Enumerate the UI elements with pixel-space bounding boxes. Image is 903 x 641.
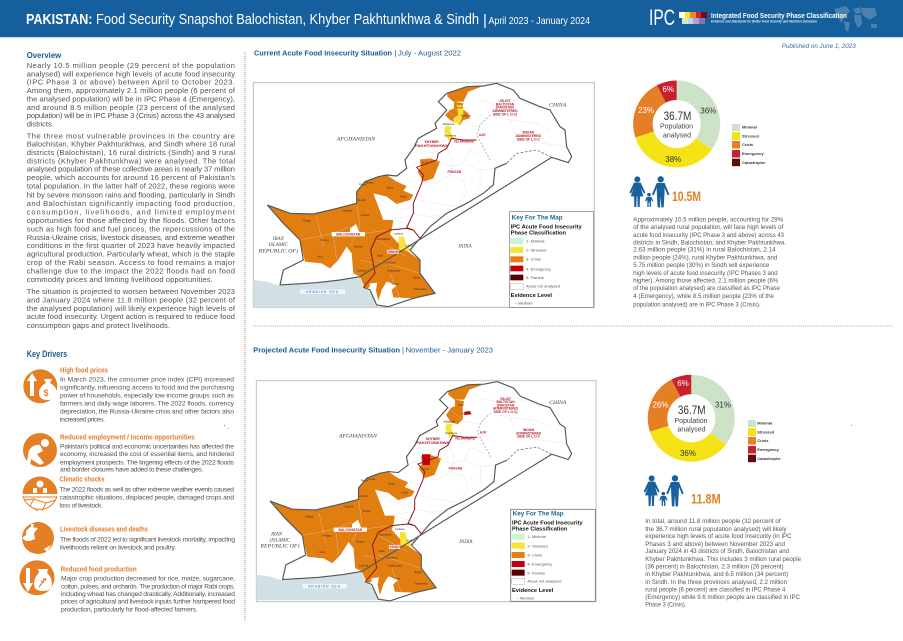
text: projected summary: experience high levels of acute food insecurity (in IPC: [645, 534, 792, 540]
driver: reduced employment: [60, 432, 235, 474]
legend: current donut: [732, 124, 766, 166]
map legend: Areas not analysed: [527, 579, 561, 584]
driver: livestock: Livestock diseases and deaths: [60, 524, 148, 534]
text: current summary: of the analysed rural population, will face high levels of: [633, 225, 784, 231]
driver: climatic shocks: Climatic shocks: [60, 474, 104, 484]
map labels: Panjgur: [323, 533, 332, 537]
map labels: PAKHTUNKHWA: [416, 441, 450, 445]
map labels: ISLAMIC: [268, 243, 289, 248]
overview text: and Balochistan significantly impacting food production,: [27, 199, 235, 208]
map: current situation: [253, 83, 594, 307]
map labels: CHINA: [549, 401, 567, 406]
overview text: commodity prices and limiting livelihood opportunities.: [27, 275, 213, 284]
overview text: the analysed population) will be in IPC Phase 4 (Emergency),: [27, 94, 235, 104]
map labels: Tharparkar: [413, 287, 427, 291]
overview text: and around 8.5 million people (23 percent of the analysed: [27, 103, 235, 112]
overview heading: Overview: [27, 50, 62, 60]
legend: projected donut: [748, 420, 781, 462]
map labels: Awaran: [356, 540, 365, 544]
driver: reduced food production: production, particularly for flood-affected farmers.: [61, 606, 198, 613]
donut chart: current: analysed: [663, 132, 691, 140]
map labels: Chagai: [305, 514, 314, 518]
map labels: Nushki: [358, 198, 366, 202]
heading: current situation: |: [394, 48, 396, 58]
map labels: Washuk: [345, 505, 355, 509]
heading: projected situation: Projected Acute Food Insecurity Situation: [253, 346, 400, 355]
map labels: ADMINISTERED: [516, 431, 542, 435]
map labels: Jamshoro: [386, 555, 398, 559]
map labels: ADMINISTERED: [493, 407, 519, 411]
map labels: BALTISTAN: [496, 400, 515, 404]
text: current summary: million people (24%), rural Khyber Pakhtunkhwa, and: [633, 256, 777, 262]
donut chart: current: 6%: [663, 85, 674, 94]
header band: [0, 0, 903, 38]
map labels: PAKHTUNKHWA: [415, 144, 449, 148]
map legend: – Medium: [517, 595, 535, 600]
map labels: Pishin: [361, 479, 369, 483]
map labels: Quetta: [365, 180, 374, 184]
map labels: AFGHANISTAN: [338, 435, 378, 440]
map labels: Kohistan: [461, 114, 472, 118]
icon: high food prices: $: [43, 388, 49, 398]
overview text: (IPC Phase 3 or above) between April to October 2023.: [27, 78, 235, 87]
map legend: 5- Famine: [527, 570, 546, 575]
map labels: Sukkur: [407, 539, 415, 543]
icon: livestock: [22, 522, 54, 554]
text: projected summary: Phase 3 (Crisis).: [645, 603, 687, 609]
text: projected summary: (36 percent) in Balochistan, 2.3 million (26 percent): [645, 565, 784, 571]
driver: climatic shocks: The 2022 floods as well as other extreme weather events caused: [60, 486, 234, 493]
legend: current donut: Minimal: [742, 124, 757, 130]
key drivers heading: Key Drivers: [27, 349, 67, 359]
overview text: and January 2024 where 11.8 million people (32 percent of: [27, 296, 236, 305]
overview text: crop of the Rabi season. Access to food remains a major: [27, 258, 235, 267]
map legend: Evidence Level: [512, 588, 554, 594]
driver: high food prices: In March 2023, the consumer price index (CPI) increased: [60, 376, 234, 384]
legend: projected donut: Catastrophe: [757, 456, 781, 461]
legend: projected donut: Emergency: [757, 447, 780, 452]
heading: projected situation: [253, 346, 493, 355]
title: Food Security Snapshot Balochistan, Khyber Pakhtunkhwa & Sindh: [96, 11, 479, 28]
legend: projected donut: Crisis: [757, 438, 769, 443]
panel: overview: [27, 50, 236, 330]
driver: climatic shocks: catastrophic situations, displaced people, damaged crops and: [60, 494, 234, 501]
map labels: Nowshera: [445, 431, 458, 435]
map labels: Kharan: [363, 509, 372, 513]
overview text: population) will be in IPC Phase 3 (Crisis) across the 43 analysed: [27, 111, 235, 120]
map labels: Jacobabad: [379, 532, 392, 536]
map labels: Larkana: [394, 231, 404, 235]
text: current summary: Approximately 10.5 million people, accounting for 29%: [633, 218, 784, 224]
overview text: analysed population of these collective areas is nearly 37 million: [27, 165, 235, 174]
stat: 10.5M: 10.5M: [672, 189, 701, 204]
overview text: such as high food and fuel prices, the repercussions of the: [27, 225, 235, 234]
map labels: Kohlu: [401, 491, 409, 495]
map labels: Kohistan: [462, 411, 473, 415]
map labels: CHINA: [549, 103, 567, 108]
map labels: Nowshera: [444, 134, 456, 138]
map labels: PUNJAB: [447, 170, 462, 174]
map legend: IPC Acute Food Insecurity: [511, 225, 583, 231]
text: projected summary: (Emergency) while 9.6 million people are classified in IPC: [645, 595, 801, 601]
text: current summary: 4 (Emergency), while 8.5 million people (23% of the: [633, 294, 775, 300]
driver: reduced food production: prices of agricultural and livestock inputs further hampered food: [61, 598, 235, 606]
map labels: INDIAN: [523, 131, 535, 135]
map labels: ADMINISTERED: [516, 134, 542, 138]
donut chart: current: Population: [660, 124, 693, 130]
map legend: Phase Classification: [511, 231, 567, 237]
donut chart: projected: [644, 371, 739, 466]
map labels: (PAKISTAN: [496, 106, 514, 110]
driver: reduced employment: employment prospects. The lingering effects of the 2022 floods: [60, 460, 235, 466]
driver: reduced food production: Reduced food production: [61, 564, 137, 574]
text: current summary: of the population analysed) are classified as IPC Phase: [633, 286, 781, 292]
driver: high food prices: power of households, especially low-income groups such as: [60, 392, 235, 400]
driver: high food prices: High food prices: [60, 366, 108, 374]
map labels: Awaran: [354, 244, 363, 248]
overview text: opportunities for those affected by the floods. Other factors: [27, 216, 235, 225]
map labels: Larkana: [395, 527, 405, 531]
map labels: ARABIAN SEA: [308, 584, 341, 588]
overview text: districts (Balochistan), 16 rural districts (Sindh) and 9 rural: [27, 148, 235, 157]
text: projected summary: Khyber Pakhtunkhwa. This includes 3 million rural people: [645, 557, 802, 563]
map labels: ISLAMABAD: [455, 437, 476, 441]
heading: projected situation: |: [402, 346, 404, 355]
map labels: INDIA: [458, 540, 473, 545]
map labels: Kharan: [361, 213, 370, 217]
driver: high food prices: increased prices.: [60, 416, 105, 424]
donut chart: current: [630, 77, 724, 171]
map legend: – Medium: [515, 300, 533, 305]
overview text: Balochistan, Khyber Pakhtunkhwa, and Sindh where 18 rural: [27, 140, 235, 149]
donut chart: projected: Population: [674, 418, 708, 425]
map labels: Hyderabad: [387, 269, 400, 273]
driver: reduced food production: [61, 564, 235, 613]
text: projected summary: Phases 3 and above) between November 2023 and: [645, 542, 785, 548]
legend: current donut: Catastrophe: [742, 160, 766, 165]
map labels: Sukkur: [405, 243, 414, 247]
map legend: 4- Emergency: [526, 266, 551, 271]
text: projected summary: in Khyber Pakhtunkhwa, and 6.5 million (34 percent): [645, 572, 788, 578]
map labels: Swat: [458, 403, 464, 407]
icon: family projected: [644, 475, 684, 506]
donut chart: current: 38%: [665, 155, 681, 164]
map labels: KHYBER: [425, 140, 439, 144]
icon: reduced employment: [23, 433, 57, 467]
map labels: BALOCHISTAN: [336, 233, 361, 237]
map labels: GILGIT: [500, 397, 511, 401]
driver: reduced food production: Major crop production decreased for rice, maize, sugarcane,: [61, 576, 235, 582]
icon: high food prices: [23, 369, 57, 403]
overview text: [27, 61, 236, 330]
map labels: [259, 397, 567, 588]
heading: current situation: July - August 2022: [398, 48, 461, 58]
map legend: 4- Emergency: [527, 562, 552, 567]
map labels: Dadu: [379, 549, 385, 553]
map labels: [257, 99, 567, 294]
map labels: D.I.K: [423, 467, 429, 471]
text: projected summary: [645, 519, 802, 609]
map legend: 5- Famine: [526, 275, 545, 280]
donut chart: current: 36.7M: [664, 111, 691, 123]
map labels: Pishin: [359, 182, 367, 186]
map labels: PUNJAB: [449, 467, 463, 471]
overview text: hit by severe monsoon rains and flooding, particularly in Sindh: [27, 191, 235, 200]
map labels: BALTISTAN: [496, 102, 515, 106]
map labels: ISLAMABAD: [454, 139, 475, 143]
map labels: Nushki: [359, 494, 368, 498]
driver: reduced employment: Reduced employment / income opportunities: [60, 432, 195, 442]
map legend: IPC Acute Food Insecurity: [512, 521, 584, 527]
map labels: IRAN: [270, 532, 283, 537]
map labels: IRAN: [272, 237, 285, 242]
driver: reduced employment: Pakistan's political and economic uncertainties has affected the: [60, 444, 234, 450]
map labels: Ziarat: [387, 185, 394, 189]
map legend: 2- Stressed: [526, 247, 546, 252]
text: projected summary: January 2024 in 43 districts of Sindh, Balochistan and: [645, 549, 789, 555]
map labels: AJK: [480, 430, 487, 434]
driver: livestock: The floods of 2022 led to significant livestock mortality, impacting: [60, 536, 235, 544]
driver: high food prices: [60, 366, 235, 424]
map labels: SINDH: [389, 545, 400, 549]
icon: reduced food production: [20, 560, 54, 595]
legend: current donut: Emergency: [742, 151, 764, 156]
map legend: Evidence Level: [511, 293, 552, 299]
map labels: Jacobabad: [377, 237, 390, 241]
driver: high food prices: depreciation, the Russia-Ukraine crisis and other factors also: [60, 408, 234, 416]
text: projected summary: rural people (6 percent) are classified in IPC Phase 4: [645, 588, 786, 594]
map legend: 3- Crisis: [527, 553, 542, 558]
map labels: ADMINISTERED: [492, 109, 518, 113]
map labels: (PAKISTAN: [497, 403, 515, 407]
map labels: (ISLAMIC: [270, 538, 291, 543]
text: current summary: population analysed) are in IPC Phase 3 (Crisis).: [633, 302, 761, 308]
text: current summary: acute food insecurity (IPC Phase 3 and above) across 43: [633, 233, 785, 239]
donut chart: current: 36%: [700, 106, 716, 116]
map labels: SIDE OF L.O.C): [494, 410, 517, 414]
text: current summary: higher). Among those affected, 2.1 million people (6%: [633, 278, 779, 284]
map labels: Swat: [457, 105, 463, 109]
map labels: GILGIT: [499, 99, 511, 103]
text: projected summary: the 36.7 million rural population analysed) will likely: [645, 527, 787, 533]
text: current summary: 5.75 million people (30%) in Sindh will experience: [633, 263, 770, 269]
text: current summary: districts in Sindh, Balochistan, and Khyber Pakhtunkhwa.: [633, 241, 786, 247]
map labels: Malakand: [444, 420, 456, 423]
legend: current donut: Stressed: [742, 134, 759, 138]
driver: reduced employment: and border closures have added to these challenges.: [60, 466, 203, 474]
map labels: KHYBER: [426, 437, 440, 441]
icon: family current: [629, 176, 669, 207]
overview text: Russia-Ukraine crisis, livestock diseases, and extreme weather: [27, 233, 235, 242]
overview text: districts (Khyber Pakhtunkhwa) were analysed. The total: [27, 156, 235, 165]
driver: high food prices: significantly, influencing access to food and the purchasing: [60, 384, 234, 392]
donut chart: projected: analysed: [677, 426, 706, 434]
text: current summary: 2.63 million people (31%) in rural Balochistan, 2.14: [633, 248, 776, 254]
map legend: [510, 212, 594, 307]
text: projected summary: In total, around 11.8 million people (32 percent of: [645, 519, 781, 525]
map labels: Kech: [319, 550, 326, 554]
map labels: Jamshoro: [384, 260, 396, 264]
map labels: INDIAN: [523, 428, 535, 432]
map labels: AFGHANISTAN: [336, 137, 376, 142]
overview text: consumption, livelihoods, and limited employment: [27, 208, 236, 217]
map labels: BALOCHISTAN: [338, 528, 363, 532]
driver: climatic shocks: [60, 474, 234, 509]
text: current summary: high levels of acute food insecurity (IPC Phases 3 and: [633, 271, 778, 277]
legend: current donut: Crisis: [742, 142, 754, 147]
driver: reduced employment: economy, increased the cost of essential items, and hindered: [60, 451, 234, 458]
overview text: analysed) will experience high levels of acute food insecurity: [27, 69, 235, 78]
map labels: SIDE OF L.O.C): [493, 112, 517, 116]
map legend: Key For The Map: [512, 215, 563, 222]
map legend: 1- Minimal: [526, 238, 544, 243]
map labels: SIDE OF L.O.C: [517, 435, 541, 439]
map labels: Tharparkar: [415, 582, 428, 586]
overview text: people, which accounts for around 16 percent of Pakistan's: [27, 173, 235, 182]
overview text: consumption gaps and protect livelihoods.: [27, 321, 170, 330]
map labels: Hyderabad: [388, 564, 402, 568]
map labels: Lasbela: [359, 564, 369, 568]
title: |: [483, 12, 487, 29]
map labels: Quetta: [367, 477, 376, 481]
text: projected summary: in Sindh. In the three provinces analysed, 2.2 million: [645, 580, 787, 586]
text: current summary: [633, 218, 786, 308]
IPC logo: [649, 5, 877, 32]
map labels: Washuk: [343, 209, 353, 213]
donut chart: projected: 6%: [677, 379, 689, 388]
map legend: [511, 509, 595, 601]
title: PAKISTAN:: [26, 11, 92, 28]
map legend: Phase Classification: [512, 527, 568, 533]
map labels: Malakand: [443, 122, 455, 126]
map legend: Key For The Map: [513, 511, 564, 518]
IPC logo: IPC: [649, 5, 675, 30]
driver: livestock: livelihoods reliant on livestock and poultry.: [60, 544, 176, 552]
map labels: Badin: [413, 275, 421, 279]
map labels: D.I.K: [422, 160, 428, 164]
map labels: AJK: [479, 133, 486, 137]
map labels: INDIA: [457, 245, 473, 250]
map labels: Chagai: [302, 219, 311, 223]
map labels: ARABIAN SEA: [306, 290, 339, 294]
publication date: Published on June 1, 2023: [782, 43, 856, 50]
overview text: Among them, approximately 2.1 million people (6 percent of: [27, 86, 236, 95]
IPC logo: Integrated Food Security Phase Classification: [711, 11, 847, 20]
map labels: Badin: [415, 570, 422, 574]
legend: projected donut: Stressed: [757, 430, 775, 434]
heading: current situation: Current Acute Food Insecurity Situation: [254, 48, 392, 58]
driver: high food prices: farmers and daily wage laborers. The 2022 floods, currency: [60, 400, 235, 408]
map labels: Kech: [317, 255, 324, 259]
donut chart: projected: 36%: [680, 449, 696, 458]
overview text: The situation is projected to worsen between November 2023: [27, 287, 235, 296]
donut chart: current: 23%: [638, 106, 654, 115]
heading: projected situation: November - January 2023: [406, 346, 493, 355]
overview text: Nearly 10.5 million people (29 percent of the population: [27, 61, 235, 70]
heading: current situation: [254, 48, 461, 58]
stat: 11.8M: 11.8M: [691, 491, 721, 506]
map legend: Areas not analysed: [526, 284, 560, 289]
driver: livestock: [60, 524, 235, 552]
driver: reduced food production: cotton, pulses, and orchards. The production of major Rabi crops,: [61, 584, 235, 590]
title: April 2023 - January 2024: [488, 15, 590, 27]
IPC logo: Evidence and Standards for Better Food Security and Nutrition Decisions: [711, 20, 817, 24]
map labels: REPUBLIC OF): [257, 249, 298, 254]
overview text: total population. In the latter half of 2022, these regions were: [27, 181, 235, 190]
map legend: 1- Minimal: [527, 534, 546, 539]
map labels: Kohlu: [400, 194, 407, 198]
map labels: Dadu: [377, 254, 384, 258]
donut chart: projected: 31%: [715, 400, 731, 409]
donut chart: projected: 26%: [652, 400, 669, 409]
driver: reduced food production: including wheat has changed drastically. Additionally, increased: [61, 591, 235, 598]
map labels: Panjgur: [320, 238, 330, 242]
map labels: SINDH: [388, 250, 399, 254]
overview text: districts.: [27, 120, 54, 129]
map labels: Ziarat: [388, 482, 395, 486]
map labels: Thatta: [391, 282, 399, 286]
map legend: 2- Stressed: [527, 543, 548, 548]
driver: climatic shocks: loss of livestock.: [60, 502, 103, 509]
map legend: 3- Crisis: [526, 257, 541, 262]
overview text: agricultural production. Particularly wheat, which is the staple: [27, 250, 235, 259]
overview text: conditions in the first quarter of 2023 have heavily impacted: [27, 241, 235, 250]
legend: projected donut: Minimal: [757, 420, 772, 426]
overview text: the analysed population) will likely experience high levels of: [27, 304, 236, 313]
overview text: challenge due to the impact the 2022 floods had on food: [27, 267, 235, 276]
map labels: REPUBLIC OF): [259, 545, 300, 550]
map: projected situation: [256, 381, 596, 602]
icon: climatic shocks: [22, 476, 58, 511]
map labels: Lasbela: [357, 269, 367, 273]
map labels: SIDE OF L.O.C: [517, 137, 540, 141]
overview text: The three most vulnerable provinces in the country are: [27, 131, 235, 140]
donut chart: projected: 36.7M: [678, 405, 706, 417]
map labels: Thatta: [393, 577, 401, 581]
panel: key drivers: [20, 349, 235, 613]
overview text: acute food insecurity. Urgent action is required to reduce food: [27, 312, 235, 321]
